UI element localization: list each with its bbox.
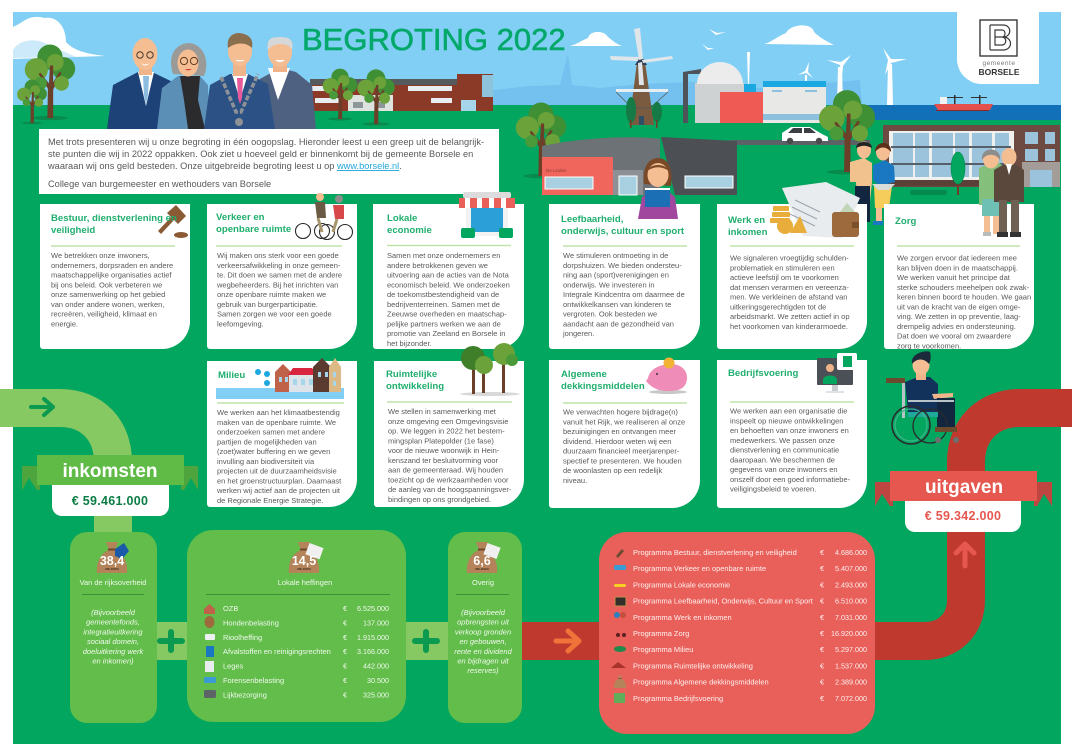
birds [702,29,726,50]
income connectors [157,622,448,660]
body text: actieve leefstijl om te voorkomen [730,273,839,282]
icon: papers, coins and wallet [770,182,860,238]
heading: Ruimtelijke [386,369,437,380]
arrow: expenses up [956,544,974,566]
heading: Werk en [728,215,765,226]
tree right of intro [516,102,566,178]
board members [107,33,316,129]
programme amounts: 6.510.000 [835,597,867,606]
icon: money bag 6,6: MILJOEN [475,567,489,571]
body text: ving. We zetten in op preventie, laag- [897,312,1021,321]
body text: op. We leggen in 2022 het bestem- [388,426,505,436]
body text: ontwikkelkansen van kinderen te [563,300,671,309]
body text: recreëren, veiligheid, klimaat en [51,310,157,319]
body text: de Regionale Energie Strategie. [217,496,323,505]
heading: Lokale [387,213,417,224]
hedge [910,190,947,195]
body text: en het groenstructuurplan. Daarnaast [217,476,342,485]
euro signs: € [343,690,348,699]
tax labels: Leges [223,662,244,671]
explanation: en gebouwen, [459,637,507,646]
body text: de toekomstbestendigheid van de [387,290,499,299]
distant skyline [493,54,862,105]
body text: We werken vanuit het principe dat [897,273,1011,282]
body text: kan blijven doen in de maatschappij. [897,263,1018,272]
explanation: en bijdragen uit [457,656,510,666]
amount box [905,500,1021,532]
body text: en behoeften van onze inwoners en [730,426,849,435]
programme labels: Programma Bestuur, dienstverlening en veiligheid [633,548,797,557]
euro signs: € [343,618,348,627]
body text: aandacht aan de gezondheid van [563,319,674,328]
body text: onze samenwerking op het gebied [51,290,165,299]
sky [13,12,1061,105]
explanation: sociaal domein, [87,637,139,646]
body text: energie. [51,319,78,328]
wind turbines [798,48,907,105]
car [782,127,828,144]
person: alderman left [107,38,180,129]
euro signs: € [820,678,825,687]
body text: ning aan (sport)verenigingen en [563,270,669,280]
amount box [52,484,169,516]
programme amounts: 2.493.000 [835,580,867,589]
programme amounts: 5.297.000 [835,645,867,654]
body text: het voorkomen van kinderarmoede. [730,322,848,331]
body text: Samen met onze ondernemers en [387,251,500,260]
card: Verkeer [207,193,357,349]
logo wordmark [978,60,1020,77]
body text: dorpshuizen. We bieden ondersteu- [563,261,682,270]
person: alderwoman [157,43,209,129]
body text: ondernemers, dorpsraden en andere [51,261,173,270]
heading: openbare ruimte [216,224,291,235]
intro text panel [39,129,499,194]
body text: andere betrokkenen geven we [387,261,488,270]
icon: money bag 14,5: MILJOEN [297,567,311,571]
plus 1 [160,632,182,650]
heading: Verkeer en [216,212,265,223]
icon: gavel [158,205,188,238]
body text: maatschappelijke organisaties actief [51,270,172,280]
body text: leefomgeving. [217,319,264,328]
flow band: expenses [520,408,1072,641]
amount box: € 59.461.000 [72,494,148,508]
heading: Leefbaarheid, [561,214,624,225]
body text: wegbeheerders. Bij het inrichten van [216,280,338,289]
explanation: verkoop gronden [455,627,511,636]
trees by town hall [323,69,395,126]
body text: maken van de openbare ruimte. We [217,418,336,427]
body text: gegevens van onze inwoners en [730,465,838,474]
cloud right [764,25,834,45]
euro signs: € [343,676,348,685]
ribbon: inkomsten [22,455,198,516]
road [730,140,870,145]
icon: cyclists [296,193,352,240]
body text: (zoet)water buffering en we geven [217,447,330,456]
programme labels: Programma Verkeer en openbare ruimte [633,564,766,573]
body text: toezicht op de werkzaamheden voor [388,475,509,484]
card: Algemene dekkingsmiddelen [549,358,700,508]
body text: dat mensen verarmen en vereenza- [730,283,849,292]
tax labels: Forensenbelasting [223,676,284,685]
body text: bindingen op ons grondgebied. [388,495,491,504]
programme labels: Programma Bedrijfsvoering [633,694,723,703]
explanation: en inkomen) [92,656,134,666]
card: Werk en inkomen [717,182,867,349]
tax amounts: 1.915.000 [357,633,389,642]
body text: dividend. Hierdoor weten wij een [563,437,671,446]
ship [934,95,993,111]
programme labels: Programma Milieu [633,645,693,654]
programme labels: Programma Ruimtelijke ontwikkeling [633,661,753,670]
body text: spectief te presenteren. We houden [563,456,682,465]
body text: veiligingsbeleid te voeren. [730,485,816,494]
euro signs: € [820,661,825,670]
card: Bedrijfsvoering [717,353,867,508]
programme amounts: 16.920.000 [831,629,867,638]
icon: shop [459,192,515,238]
euro signs: € [820,548,825,557]
body text: bedrijventerreinen. Samen met de [387,300,500,309]
card: Milieu [207,358,357,507]
tax amounts: 442.000 [363,662,389,671]
tree by road [819,90,875,174]
programme labels: Programma Algemene dekkingsmiddelen [633,678,769,687]
explanation: (Bijvoorbeeld [91,608,136,617]
body text: duurzaam financieel meerjarenper- [563,447,680,456]
icon: elderly couple [979,148,1024,237]
body text: uitvoering aan de acties van de Nota [387,270,510,280]
icon: money bag 6,6: 6,6 [473,554,491,568]
explanation: integratieuitkering [83,627,143,636]
icon: trees [460,343,520,396]
body text: arbeidsmarkt. We zetten actief in op [730,312,850,321]
icon: money bag 14,5: 14,5 [292,554,316,568]
icon: water band [216,388,344,399]
body text: dienstverlening en communicatie [730,446,839,455]
body text: We verwachten hogere bijdrage(n) [563,408,678,416]
body text: problematiek en stimuleren een [730,263,835,272]
body text: aan de gemeenteraad. Wij houden [388,466,503,475]
body text: jongeren. [562,329,594,338]
body text: economisch beleid. We onderzoeken [387,280,510,289]
body text: uitkeringsgerechtigden tot de [730,302,826,311]
intro text panel: ste punten die wij in 2022 oppakken. Ook ziet u hoeveel geld er binnenkomt bij de gemeente Borsele en [48,149,473,159]
sea [862,105,1061,120]
body text: drempelig advies en ondersteuning. [897,322,1016,331]
body text: mingsplan Platepolder (1e fase) [388,436,494,445]
body text: We werken aan het klimaatbestendig [217,408,340,417]
explanation: reserves) [467,666,499,675]
body text: van onder andere wonen, werken, [51,300,164,309]
programme labels: Programma Zorg [633,629,689,638]
tax labels: OZB [223,604,238,613]
panel: overig [448,532,522,723]
body text: onze omgeving een Omgevingsvisie [388,417,508,426]
tax amounts [357,604,389,699]
programme labels: Programma Lokale economie [633,580,730,589]
tax amounts: 325.000 [363,690,389,699]
power plant [683,52,826,123]
flow band: income [0,408,113,540]
body text: Integrale Kindcentra om daarmee de [563,290,685,299]
tax labels: Rioolheffing [223,633,262,642]
programme amounts: 5.407.000 [835,564,867,573]
body text: onszelf door een goed informatiebe- [730,475,851,484]
title: BEGROTING 2022 [302,22,566,57]
intro text panel: College van burgemeester en wethouders van Borsele [48,179,271,189]
person: mayor with chain [204,33,275,129]
heading: Algemene [561,369,607,380]
tax amounts: 6.525.000 [357,604,389,613]
body text: projecten uit de duurzaamheidsvisie [217,467,337,476]
body text: onze openbare ruimte maken we [217,290,326,299]
apartment building [883,125,1060,187]
body text: de aanleg van de hoogspanningsver- [388,485,512,494]
panel: lokale heffingen [187,530,406,722]
body text: pelijke partners werken we aan de [387,319,501,328]
panel: van de rijksoverheid: Van de rijksoverheid [80,578,146,587]
body text: bezuinigingen en ontvangen meer [563,427,677,436]
body text: kenszand ter besluitvorming voor [388,456,499,465]
body text: Wij maken ons sterk voor een goede [217,251,339,260]
icon: money bag 6,6 [467,542,501,573]
label: inkomsten [62,461,158,482]
icon: girl reading [638,158,678,219]
windmill [610,28,673,128]
explanation: doeluitkering werk [83,647,144,656]
icon: piggy bank [646,358,687,394]
intro text panel: waaraan wij ons geld besteden. Onze uitgebreide begroting leest u op www.borsele.nl. [48,161,402,171]
programme amounts [831,548,867,703]
body text: onderzoeken samen met andere [217,428,325,436]
arrow: income direction [31,399,53,415]
heading: onderwijs, cultuur en sport [561,226,685,237]
tax labels: Hondenbelasting [223,618,279,627]
row icons [204,604,216,698]
heading: Milieu [218,370,245,381]
label: uitgaven [925,477,1003,498]
body text: vanuit het Rijk, we realiseren al onze [563,417,685,426]
tax amounts: 3.166.000 [357,647,389,656]
body text: bij ons beleid. Ook verbeteren we [51,280,162,289]
explanation: opbrengsten uit [457,618,510,627]
amount box: € 59.342.000 [925,509,1001,523]
heading: dekkingsmiddelen [561,381,645,392]
body text: de woonlasten op een redelijk [563,466,662,475]
euro signs: € [820,629,825,638]
heading: inkomen [728,227,768,238]
body text: onderwijs. We investeren in [563,280,655,289]
body text: te. Dit doen we samen met de andere [217,270,342,280]
panel: van de rijksoverheid [70,532,157,723]
family couple [850,142,895,225]
body text: men. We verkleinen de afstand van [730,293,847,302]
icon: water drops [255,369,270,386]
euro signs: € [343,604,348,613]
programme amounts: 7.031.000 [835,613,867,622]
body text: vergroten. Ook besteden we [563,310,657,319]
euro signs: € [820,597,825,606]
card: Lokale economie [373,192,524,349]
heading: economie [387,225,432,236]
euro signs: € [820,694,825,703]
body text: werken wij actief aan de projecten uit [216,486,341,495]
cloud left [13,17,105,59]
logo mark [980,20,1017,56]
body text: promotie van Zeeland en Borsele in [387,329,505,338]
euro signs: € [343,633,348,642]
body text: Samen zorgen we voor een goede [217,310,332,319]
body text: medewerkers. We passen onze [730,436,835,445]
heading: Bestuur, dienstverlening en [51,213,177,224]
body text: keren binnen boord te houden. We gaan [897,293,1031,302]
euro signs: € [820,645,825,654]
body text: We stimuleren ontmoeting in de [563,251,668,260]
euro signs: € [820,580,825,589]
tax amounts: 30.500 [367,676,389,685]
tax amounts: 137.000 [363,618,389,627]
intro text panel: Met trots presenteren wij u onze begroting in één oogopslag. Hieronder leest u een greep uit de belangrijk- [48,137,484,147]
icon: money bag 38,4 [97,542,129,573]
euro signs: € [343,647,348,656]
card: Leefbaarheid [549,158,700,349]
body text: het bijzonder. [387,339,432,348]
logo tab [957,12,1039,84]
card: Ruimtelijke ontwikkeling [374,343,524,507]
programme labels: Programma Leefbaarheid, Onderwijs, Cultuur en Sport [633,597,814,606]
person: alderman right [258,37,316,129]
panel: programma's [599,532,875,734]
panel: overig: Overig [472,578,494,587]
body text: invulling aan biodiversiteit via [217,457,315,466]
small cypress tree [951,152,965,195]
body text: partijen de mogelijkheden van [217,437,317,446]
programme amounts: 1.537.000 [835,661,867,670]
logo wordmark: BORSELE [978,67,1020,77]
body text: verkeersafwikkeling in onze gemeen- [217,261,341,270]
programme amounts: 4.686.000 [835,548,867,557]
body text: uit van de kracht van de eigen omge- [897,302,1021,311]
tax labels: Afvalstoffen en reinigingsrechten [223,647,331,656]
programme amounts: 2.389.000 [835,678,867,687]
icon: houses [275,358,341,392]
icon: money bag 38,4: 38,4 [100,554,124,568]
icon: monitor with chat [817,353,857,393]
heading: veiligheid [51,225,95,236]
body text: We werken aan een organisatie die [730,406,847,416]
body text: voor de nieuwe woonwijk in Hein- [388,446,500,455]
icon: money bag 14,5 [289,542,324,573]
heading: ontwikkeling [386,381,444,392]
euro signs: € [343,662,348,671]
body text: We betrekken onze inwoners, [51,251,150,260]
arrow: to expenses [556,631,579,651]
body text: daaropaan. We beschermen de [730,455,835,464]
logo wordmark: gemeente [983,60,1015,67]
tax labels: Lijkbezorging [223,690,267,699]
programme icons [611,549,626,703]
body text: zorg te voorkomen. [897,342,961,350]
card: Zorg [884,148,1034,350]
body text: We stellen in samenwerking met [388,407,497,416]
body text: sterke schouders meehelpen ook zwak- [897,283,1030,292]
panel: lokale heffingen: Lokale heffingen [278,578,332,587]
card: Bestuur [40,204,190,349]
community centre building: De Linden [546,168,567,173]
wheelchair user [886,351,959,444]
programme amounts: 7.072.000 [835,694,867,703]
body text: inspeelt op nieuwe ontwikkelingen [730,416,843,425]
heading: Bedrijfsvoering [728,368,799,379]
body text: Dat doen we vooral om zwaardere [897,332,1011,341]
explanation: gemeentefonds, [86,618,140,627]
heading: Zorg [895,216,916,227]
programme labels: Programma Werk en inkomen [633,613,732,622]
euro signs: € [820,564,825,573]
body text: Zeeuwse overheden en maatschap- [387,310,507,319]
explanation: rente en dividend [454,647,513,656]
body text: niveau. [563,476,587,485]
body text: gebruik van burgerparticipatie. [217,300,318,309]
trees left [17,45,75,124]
body text: We zorgen ervoor dat iedereen mee [897,254,1017,262]
ribbon: uitgaven [875,471,1052,532]
town hall building [310,74,493,111]
body text: We signaleren vroegtijdig schulden- [730,254,849,262]
community centre building [542,137,737,195]
cloud centre [570,32,622,46]
euro signs: € [820,613,825,622]
icon: money bag 38,4: MILJOEN [105,567,119,571]
explanation: (Bijvoorbeeld [461,608,506,617]
plus 2 [415,632,437,650]
